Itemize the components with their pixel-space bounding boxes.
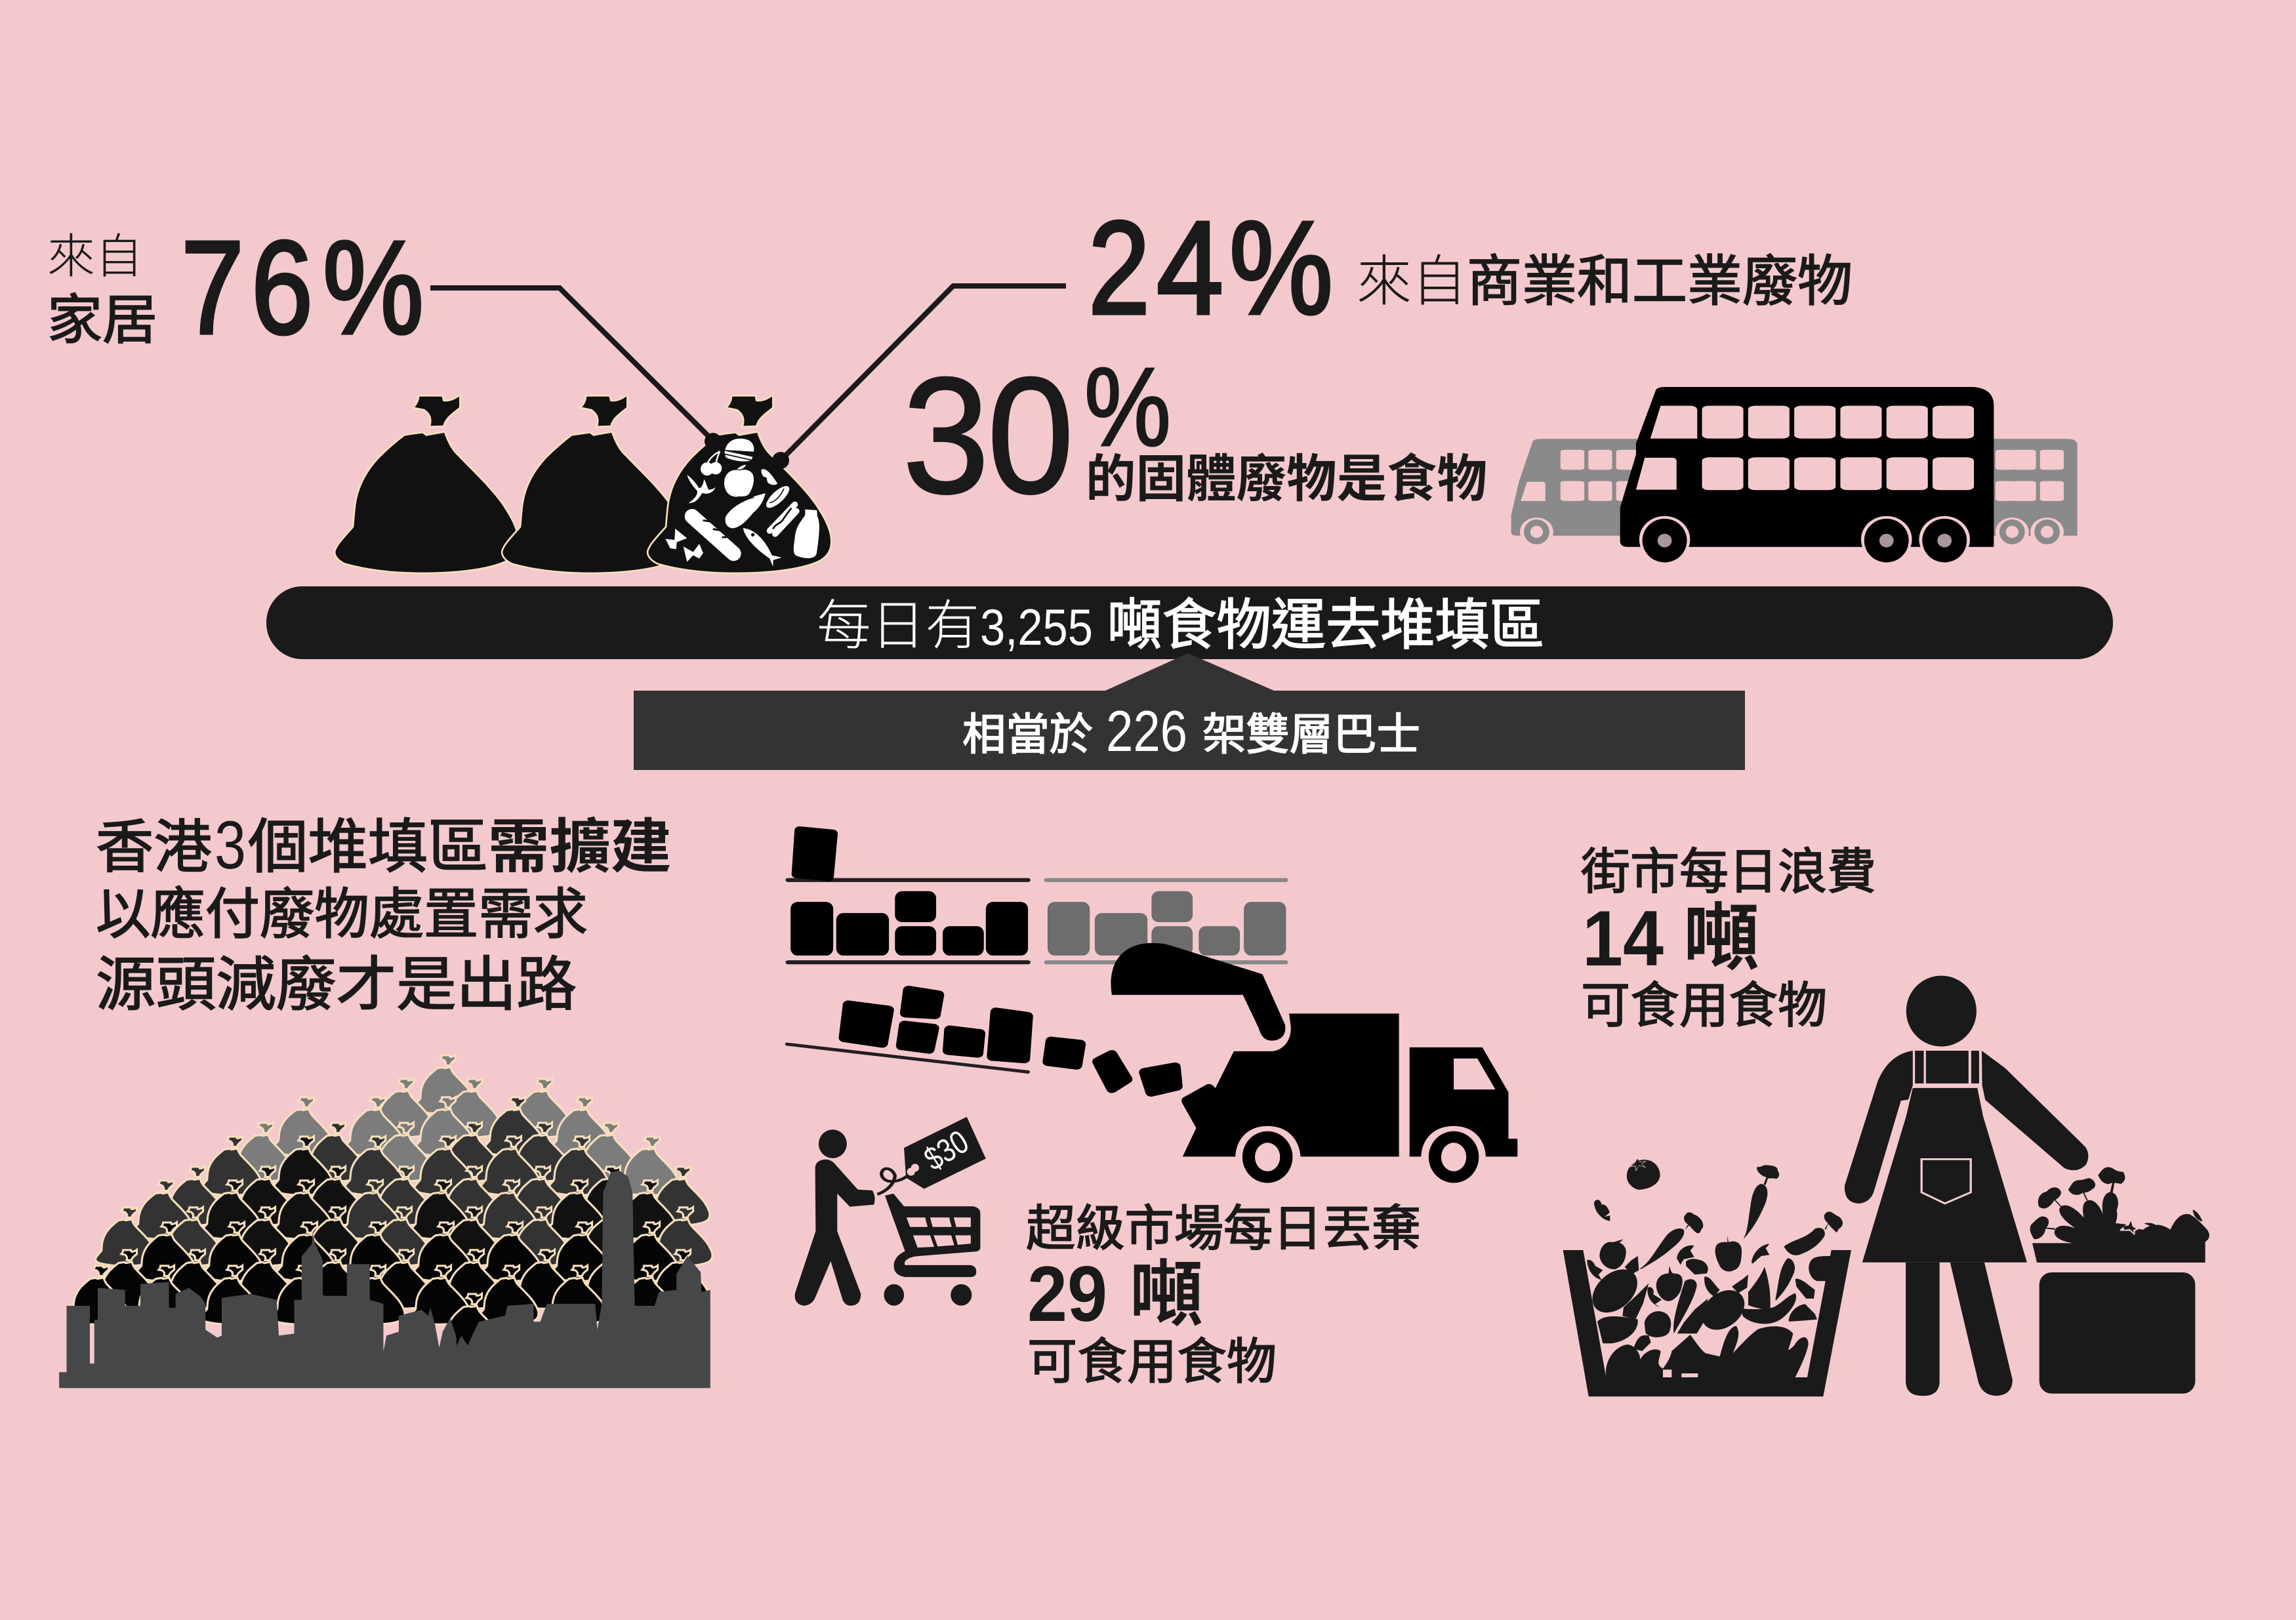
illustration: pile of garbage bags xyxy=(67,1055,712,1352)
icon: food bag with white food silhouettes xyxy=(647,395,831,573)
icon: shopper with cart and price tag xyxy=(795,1117,986,1306)
stat: 30% of solid waste is food: % xyxy=(1084,345,1171,470)
icon: double decker buses xyxy=(1511,387,2078,563)
stat: 24% from commercial and industrial waste: 來自 xyxy=(1357,237,1467,317)
illustration: supermarket shelves and garbage truck xyxy=(785,830,1517,1183)
stat: 76% from households: 6 xyxy=(251,213,313,361)
stat: 76% from households: 來自 xyxy=(47,218,143,287)
stat: 30% of solid waste is food: 3 xyxy=(903,344,989,528)
mushrooms and bamboo xyxy=(1587,1244,1817,1333)
heading: landfills need expansion: 香港 xyxy=(96,801,212,884)
banner: daily tonnes to landfill: 每日有 xyxy=(817,582,979,660)
icon: black bag 1 xyxy=(335,395,518,573)
shopping cart xyxy=(884,1194,980,1306)
banner: daily tonnes to landfill: 噸食物運去堆填區 xyxy=(1107,581,1544,660)
text: supermarket 29 tonnes: 噸 xyxy=(1130,1236,1203,1341)
tilted shelf and falling products xyxy=(787,990,1177,1092)
stat: 30% of solid waste is food: 0 xyxy=(987,344,1074,528)
flying mushroom xyxy=(1594,1200,1610,1221)
text: street markets 14 tonnes xyxy=(1581,832,1876,1037)
connector lines from percentages to food bag xyxy=(430,286,1066,469)
text: street markets 14 tonnes: 街市每日浪費 xyxy=(1581,832,1876,903)
heading: landfills need expansion: 以應付廢物處置需求 xyxy=(96,870,588,950)
shelves: grey set xyxy=(1044,878,1288,964)
stat: 24% from commercial and industrial waste: 商業和工業廢物 xyxy=(1467,237,1853,317)
tomato xyxy=(1627,1158,1660,1190)
shelves: black set xyxy=(785,830,1031,964)
icon: crate of vegetables on box xyxy=(2030,1167,2209,1394)
lower pile mass xyxy=(1597,1316,1638,1343)
stat: 30% of solid waste is food xyxy=(903,344,1487,528)
stat: 24% from commercial and industrial waste: % xyxy=(1229,193,1333,342)
stat: 76% from households: 家居 xyxy=(47,276,157,354)
icon: black bag 2 xyxy=(502,395,686,573)
stat: 76% from households xyxy=(47,213,424,361)
icon: shopper with cart and price tag: $30 xyxy=(918,1123,975,1178)
text: supermarket 29 tonnes: 超級市場每日丟棄 xyxy=(1026,1188,1421,1260)
icon: three garbage bags xyxy=(335,395,831,573)
icon: grey bus behind xyxy=(1511,439,2078,546)
stat: 24% from commercial and industrial waste: 2 xyxy=(1088,193,1150,342)
text: supermarket 29 tonnes: 可食用食物 xyxy=(1027,1322,1277,1393)
stat: 30% of solid waste is food: 的固體廢物是食物 xyxy=(1086,438,1487,512)
heading: landfills need expansion: 3 xyxy=(215,807,246,883)
illustration: Hong Kong skyline xyxy=(59,1171,710,1388)
heading: landfills need expansion: 需擴建 xyxy=(488,799,672,884)
stat: 24% from commercial and industrial waste: 4 xyxy=(1157,193,1223,342)
apples and peppers xyxy=(1599,1235,1830,1337)
carrots xyxy=(1640,1165,1843,1301)
banner: daily tonnes to landfill: 3,255 xyxy=(980,598,1093,656)
callout: equivalent to 226 buses xyxy=(634,653,1745,770)
banner: daily tonnes to landfill xyxy=(266,581,2113,660)
callout: equivalent to 226 buses: 226 xyxy=(1106,699,1187,763)
shopper figure xyxy=(795,1129,875,1306)
icon: tub overflowing with discarded vegetables xyxy=(1563,1158,1851,1396)
crate and vegetables xyxy=(2030,1167,2209,1263)
callout: equivalent to 226 buses: 架雙層巴士 xyxy=(1202,699,1420,763)
truck xyxy=(1111,943,1517,1183)
text: supermarket 29 tonnes: 29 xyxy=(1027,1250,1107,1338)
callout: equivalent to 226 buses: 相當於 xyxy=(962,699,1093,763)
icon: black bus in front xyxy=(1620,387,1994,563)
tub xyxy=(1563,1250,1851,1396)
text: street markets 14 tonnes: 噸 xyxy=(1683,879,1759,985)
heading: landfills need expansion: 個堆填區 xyxy=(248,799,488,884)
heading: landfills need expansion: 源頭減廢才是出路 xyxy=(96,937,577,1022)
text: street markets 14 tonnes: 可食用食物 xyxy=(1581,965,1827,1037)
stat: 24% from commercial and industrial waste xyxy=(1088,193,1853,342)
icon: market vendor with apron xyxy=(1845,976,2088,1396)
heading: landfills need expansion xyxy=(96,799,672,1022)
price tag xyxy=(904,1117,986,1189)
box xyxy=(2040,1272,2195,1394)
text: street markets 14 tonnes: 14 xyxy=(1582,895,1664,982)
stat: 76% from households: 7 xyxy=(181,213,244,361)
stat: 76% from households: % xyxy=(323,213,424,361)
text: supermarket 29 tonnes xyxy=(1026,1188,1421,1393)
eggplants xyxy=(1584,1256,1796,1338)
